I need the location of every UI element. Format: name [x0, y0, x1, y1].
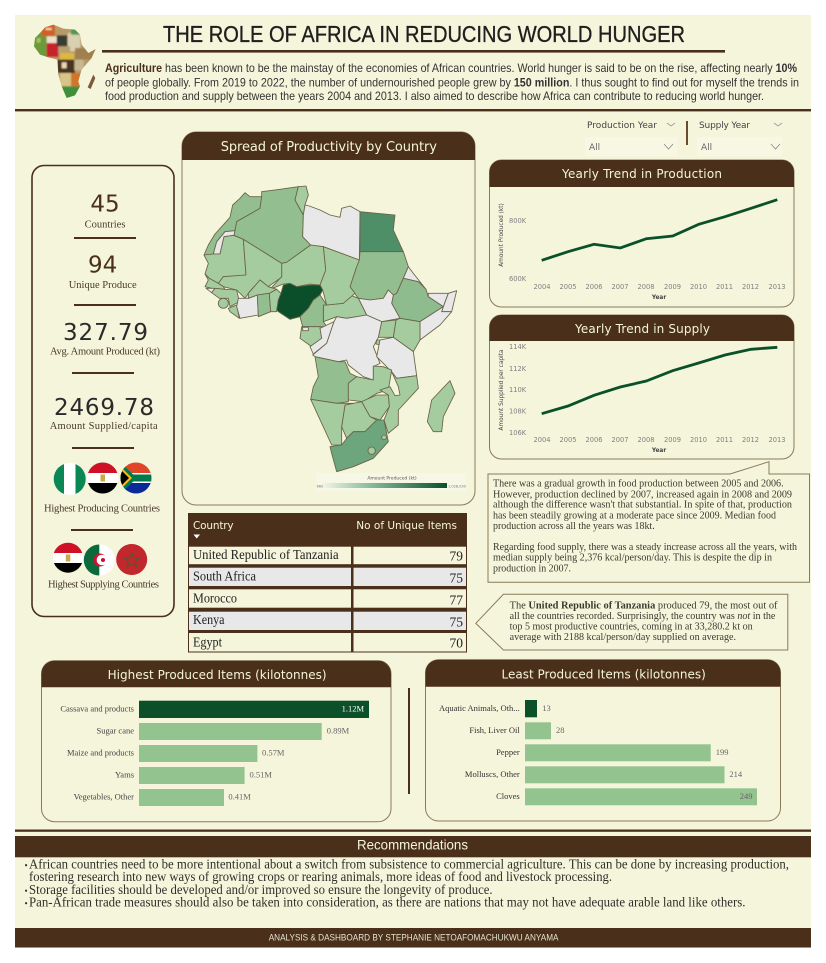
panel: recommendations: African countries need to be more intentional about a switch from subsistence to commercial agriculture. This can be done by increasing production,	[29, 856, 789, 871]
bar chart: highest produced: Maize and products	[67, 748, 134, 758]
panel: recommendations	[15, 836, 811, 910]
callout: trends commentary: However, production declined by 2007, increased again in 2008 and 2009	[493, 489, 792, 500]
bar chart: highest produced: 0.41M	[228, 792, 251, 802]
panel: recommendations: •	[24, 899, 28, 909]
line chart: supply	[542, 347, 777, 414]
panel: highest produced items	[42, 661, 391, 822]
table: unique items by country: United Republic of Tanzania	[193, 547, 339, 562]
table: unique items by country	[188, 513, 467, 652]
intro text: food production and supply between the years 2004 and 2013. I also aimed to describe how Africa can contribute to reducing world hunger.	[105, 90, 764, 103]
map legend	[316, 473, 466, 491]
panel: least produced items	[425, 660, 780, 821]
bar chart: highest produced: 0.51M	[250, 770, 272, 780]
panel: yearly trend in supply: 2008	[637, 436, 655, 444]
slicer: supply year	[697, 121, 782, 156]
slicer: production year: Production Year	[587, 121, 657, 131]
kpi: average amount produced: 327.79	[63, 320, 148, 346]
panel: yearly trend in supply: 2012	[742, 436, 759, 444]
panel: yearly trend in production: 800K	[509, 217, 527, 225]
bar chart: least produced: Pepper	[496, 747, 520, 757]
callout: Tanzania commentary	[476, 594, 788, 650]
slicer: production year	[585, 121, 677, 156]
table: unique items by country: South Africa	[193, 569, 256, 584]
callout: Tanzania commentary: average with 2188 kcal/person/day supplied on average.	[510, 632, 736, 643]
panel: recommendations: fostering research into new ways of growing crops or rearing animals, more ideas of food and livestock processing.	[29, 869, 612, 884]
intro text: of people globally. From 2019 to 2022, the number of undernourished people grew by 150 million. I thus sought to find out for myself the trends in	[105, 76, 799, 90]
callout: trends commentary: has been steadily growing at a moderate pace since 2009. Median food	[493, 510, 777, 521]
panel: yearly trend in supply: Yearly Trend in Supply	[574, 322, 710, 336]
panel: yearly trend in production: Year	[651, 295, 666, 301]
footer credit: ANALYSIS & DASHBOARD BY STEPHANIE NETOAFOMACHUKWU ANYAMA	[269, 932, 558, 942]
intro text	[105, 62, 799, 103]
map legend: 660	[316, 484, 323, 488]
panel: yearly trend in supply: 2013	[768, 436, 786, 444]
bar chart: highest produced: Sugar cane	[96, 726, 134, 736]
panel: yearly trend in supply: Amount Supplied per capita	[499, 349, 505, 430]
bar chart: highest produced: Yams	[115, 770, 134, 780]
bar chart: highest produced: 1.12M	[342, 704, 364, 714]
table: unique items by country: 70	[450, 636, 463, 651]
bar chart: least produced: 214	[729, 769, 743, 779]
icon: Algeria flag	[83, 544, 116, 576]
panel: yearly trend in production: 2013	[768, 283, 786, 291]
panel: recommendations: Storage facilities should be developed and/or improved so ensure the longevity of produce.	[29, 882, 493, 897]
bar chart: highest produced: 0.57M	[262, 748, 285, 758]
panel: yearly trend in supply: Year	[651, 448, 666, 454]
intro text: Agriculture has been known to be the mainstay of the economies of African countries. World hunger is said to be on the rise, affecting nearly 10%	[105, 62, 797, 75]
callout: Tanzania commentary: all the countries recorded. Surprisingly, the country was not in the	[510, 611, 776, 622]
panel: yearly trend in supply: 2006	[585, 436, 603, 444]
icon: Egypt flag	[87, 462, 119, 494]
panel: yearly trend in production: 2007	[611, 283, 629, 291]
panel: KPI column	[32, 166, 174, 616]
callout: Tanzania commentary: The United Republic of Tanzania produced 79, the most out of	[510, 600, 778, 611]
panel: yearly trend in production: Yearly Trend in Production	[561, 167, 722, 181]
panel: yearly trend in production: 2004	[533, 283, 551, 291]
slicer: production year: All	[589, 143, 600, 153]
kpi: unique produce: Unique Produce	[69, 280, 137, 291]
callout: trends commentary: median supply being 2,376 kcal/person/day. This is despite the dip in	[493, 553, 773, 564]
bar chart: least produced: Cloves	[496, 791, 520, 801]
icon: Nigeria flag	[54, 463, 86, 495]
bar chart: least produced: Fish, Liver Oil	[469, 725, 520, 735]
table: unique items by country: Morocco	[193, 591, 237, 606]
kpi: countries: Countries	[85, 220, 125, 231]
panel: yearly trend in supply: 2007	[611, 436, 629, 444]
kpi: unique produce	[69, 253, 137, 306]
panel: yearly trend in supply	[490, 315, 794, 459]
bar chart: highest produced: 0.89M	[327, 726, 350, 736]
kpi: amount supplied per capita: 2469.78	[54, 395, 154, 421]
icon: South Africa flag	[120, 462, 152, 494]
table: unique items by country: Kenya	[193, 612, 225, 627]
panel: recommendations: Pan-African trade measures should also be taken into consideration, as there are nations that may not have adequate arable land like others.	[29, 895, 746, 910]
panel: yearly trend in production: 2006	[585, 283, 603, 291]
map heading: Spread of Productivity by Country	[221, 140, 437, 155]
highest supplying countries flags	[48, 542, 159, 591]
panel: yearly trend in production: 2005	[559, 283, 577, 291]
panel: yearly trend in supply: 108K	[509, 408, 527, 416]
bar chart: least produced: 13	[542, 703, 551, 713]
bar chart: least produced: 199	[716, 747, 728, 757]
callout: Tanzania commentary: top 5 most productive countries, coming in at 33,280.2 kt on	[510, 622, 753, 632]
bar chart: least produced: Molluscs, Other	[465, 769, 520, 779]
table: unique items by country: Country	[193, 520, 234, 532]
table: unique items by country: 79	[450, 549, 463, 564]
panel: yearly trend in production: 2011	[716, 283, 733, 291]
panel: map	[182, 132, 475, 505]
panel: recommendations: •	[24, 860, 28, 870]
table: unique items by country: 75	[450, 571, 463, 586]
panel: yearly trend in supply: 114K	[509, 343, 527, 351]
panel: yearly trend in supply: 2004	[533, 436, 551, 444]
panel: yearly trend in supply: 112K	[509, 365, 527, 373]
title: THE ROLE OF AFRICA IN REDUCING WORLD HUNGER	[163, 21, 685, 47]
callout: trends commentary: production in 2007.	[493, 563, 571, 574]
panel: yearly trend in supply: 110K	[509, 386, 527, 394]
kpi: average amount produced	[50, 320, 160, 374]
panel: yearly trend in supply: 106K	[509, 429, 527, 437]
kpi: average amount produced: Avg. Amount Produced (kt)	[50, 347, 160, 358]
table: unique items by country: Egypt	[193, 635, 222, 650]
slicer: supply year: All	[701, 143, 712, 153]
panel: yearly trend in supply: 2011	[716, 436, 733, 444]
bar chart: least produced	[439, 700, 757, 805]
kpi: countries: 45	[90, 192, 120, 218]
line chart: production	[542, 200, 777, 260]
icon: Morocco flag	[116, 544, 147, 575]
icon: Africa food collage	[34, 24, 96, 98]
callout: trends commentary: Regarding food supply, there was a steady increase across all the years, with	[493, 542, 798, 553]
panel: yearly trend in production: 2008	[637, 283, 655, 291]
bar chart: highest produced: Cassava and products	[60, 704, 134, 714]
panel: recommendations: Recommendations	[357, 836, 468, 852]
table: unique items by country: 75	[450, 615, 463, 630]
kpi: unique produce: 94	[88, 253, 117, 279]
bar chart: least produced: 249	[740, 791, 752, 801]
panel: yearly trend in supply: 2009	[664, 436, 681, 444]
panel: least produced items: Least Produced Items (kilotonnes)	[502, 667, 706, 681]
highest producing countries flags: Highest Producing Countries	[44, 504, 160, 515]
callout: trends commentary	[488, 462, 810, 582]
panel: yearly trend in supply: 2005	[559, 436, 577, 444]
panel: yearly trend in production: 600K	[509, 275, 527, 283]
map legend: 1,028,030	[448, 484, 466, 488]
panel: yearly trend in production: 2012	[742, 283, 759, 291]
icon: Egypt flag	[53, 542, 83, 574]
callout: trends commentary: production across all the years was 18kt.	[493, 521, 655, 532]
highest producing countries flags	[44, 462, 160, 515]
highest supplying countries flags: Highest Supplying Countries	[48, 580, 159, 591]
kpi: amount supplied per capita	[50, 395, 158, 449]
table: unique items by country: 77	[450, 593, 463, 608]
map legend: Amount Produced (kt)	[367, 476, 417, 482]
bar chart: least produced: Aquatic Animals, Oth...	[439, 703, 520, 713]
panel: recommendations: •	[24, 886, 28, 896]
choropleth map of Africa	[204, 186, 457, 472]
table: unique items by country: No of Unique Items	[356, 520, 457, 532]
kpi: countries	[74, 192, 136, 239]
callout: trends commentary: There was a gradual growth in food production between 2005 and 2006.	[493, 479, 784, 490]
panel: yearly trend in supply: 2010	[690, 436, 707, 444]
kpi: amount supplied per capita: Amount Supplied/capita	[50, 421, 158, 432]
bar chart: highest produced: Vegetables, Other	[74, 792, 134, 802]
panel: highest produced items: Highest Produced Items (kilotonnes)	[108, 668, 327, 682]
bar chart: least produced: 28	[556, 725, 564, 735]
callout: trends commentary: although the difference wasn't that substantial. In spite of that, production	[493, 500, 793, 511]
panel: yearly trend in production: Amount Produced (kt)	[499, 203, 505, 267]
slicer: supply year: Supply Year	[699, 121, 750, 131]
panel: yearly trend in production: 2010	[690, 283, 707, 291]
bar chart: highest produced	[60, 701, 369, 806]
footer credit	[15, 928, 811, 948]
panel: yearly trend in production: 2009	[664, 283, 681, 291]
panel: yearly trend in production	[490, 160, 794, 307]
